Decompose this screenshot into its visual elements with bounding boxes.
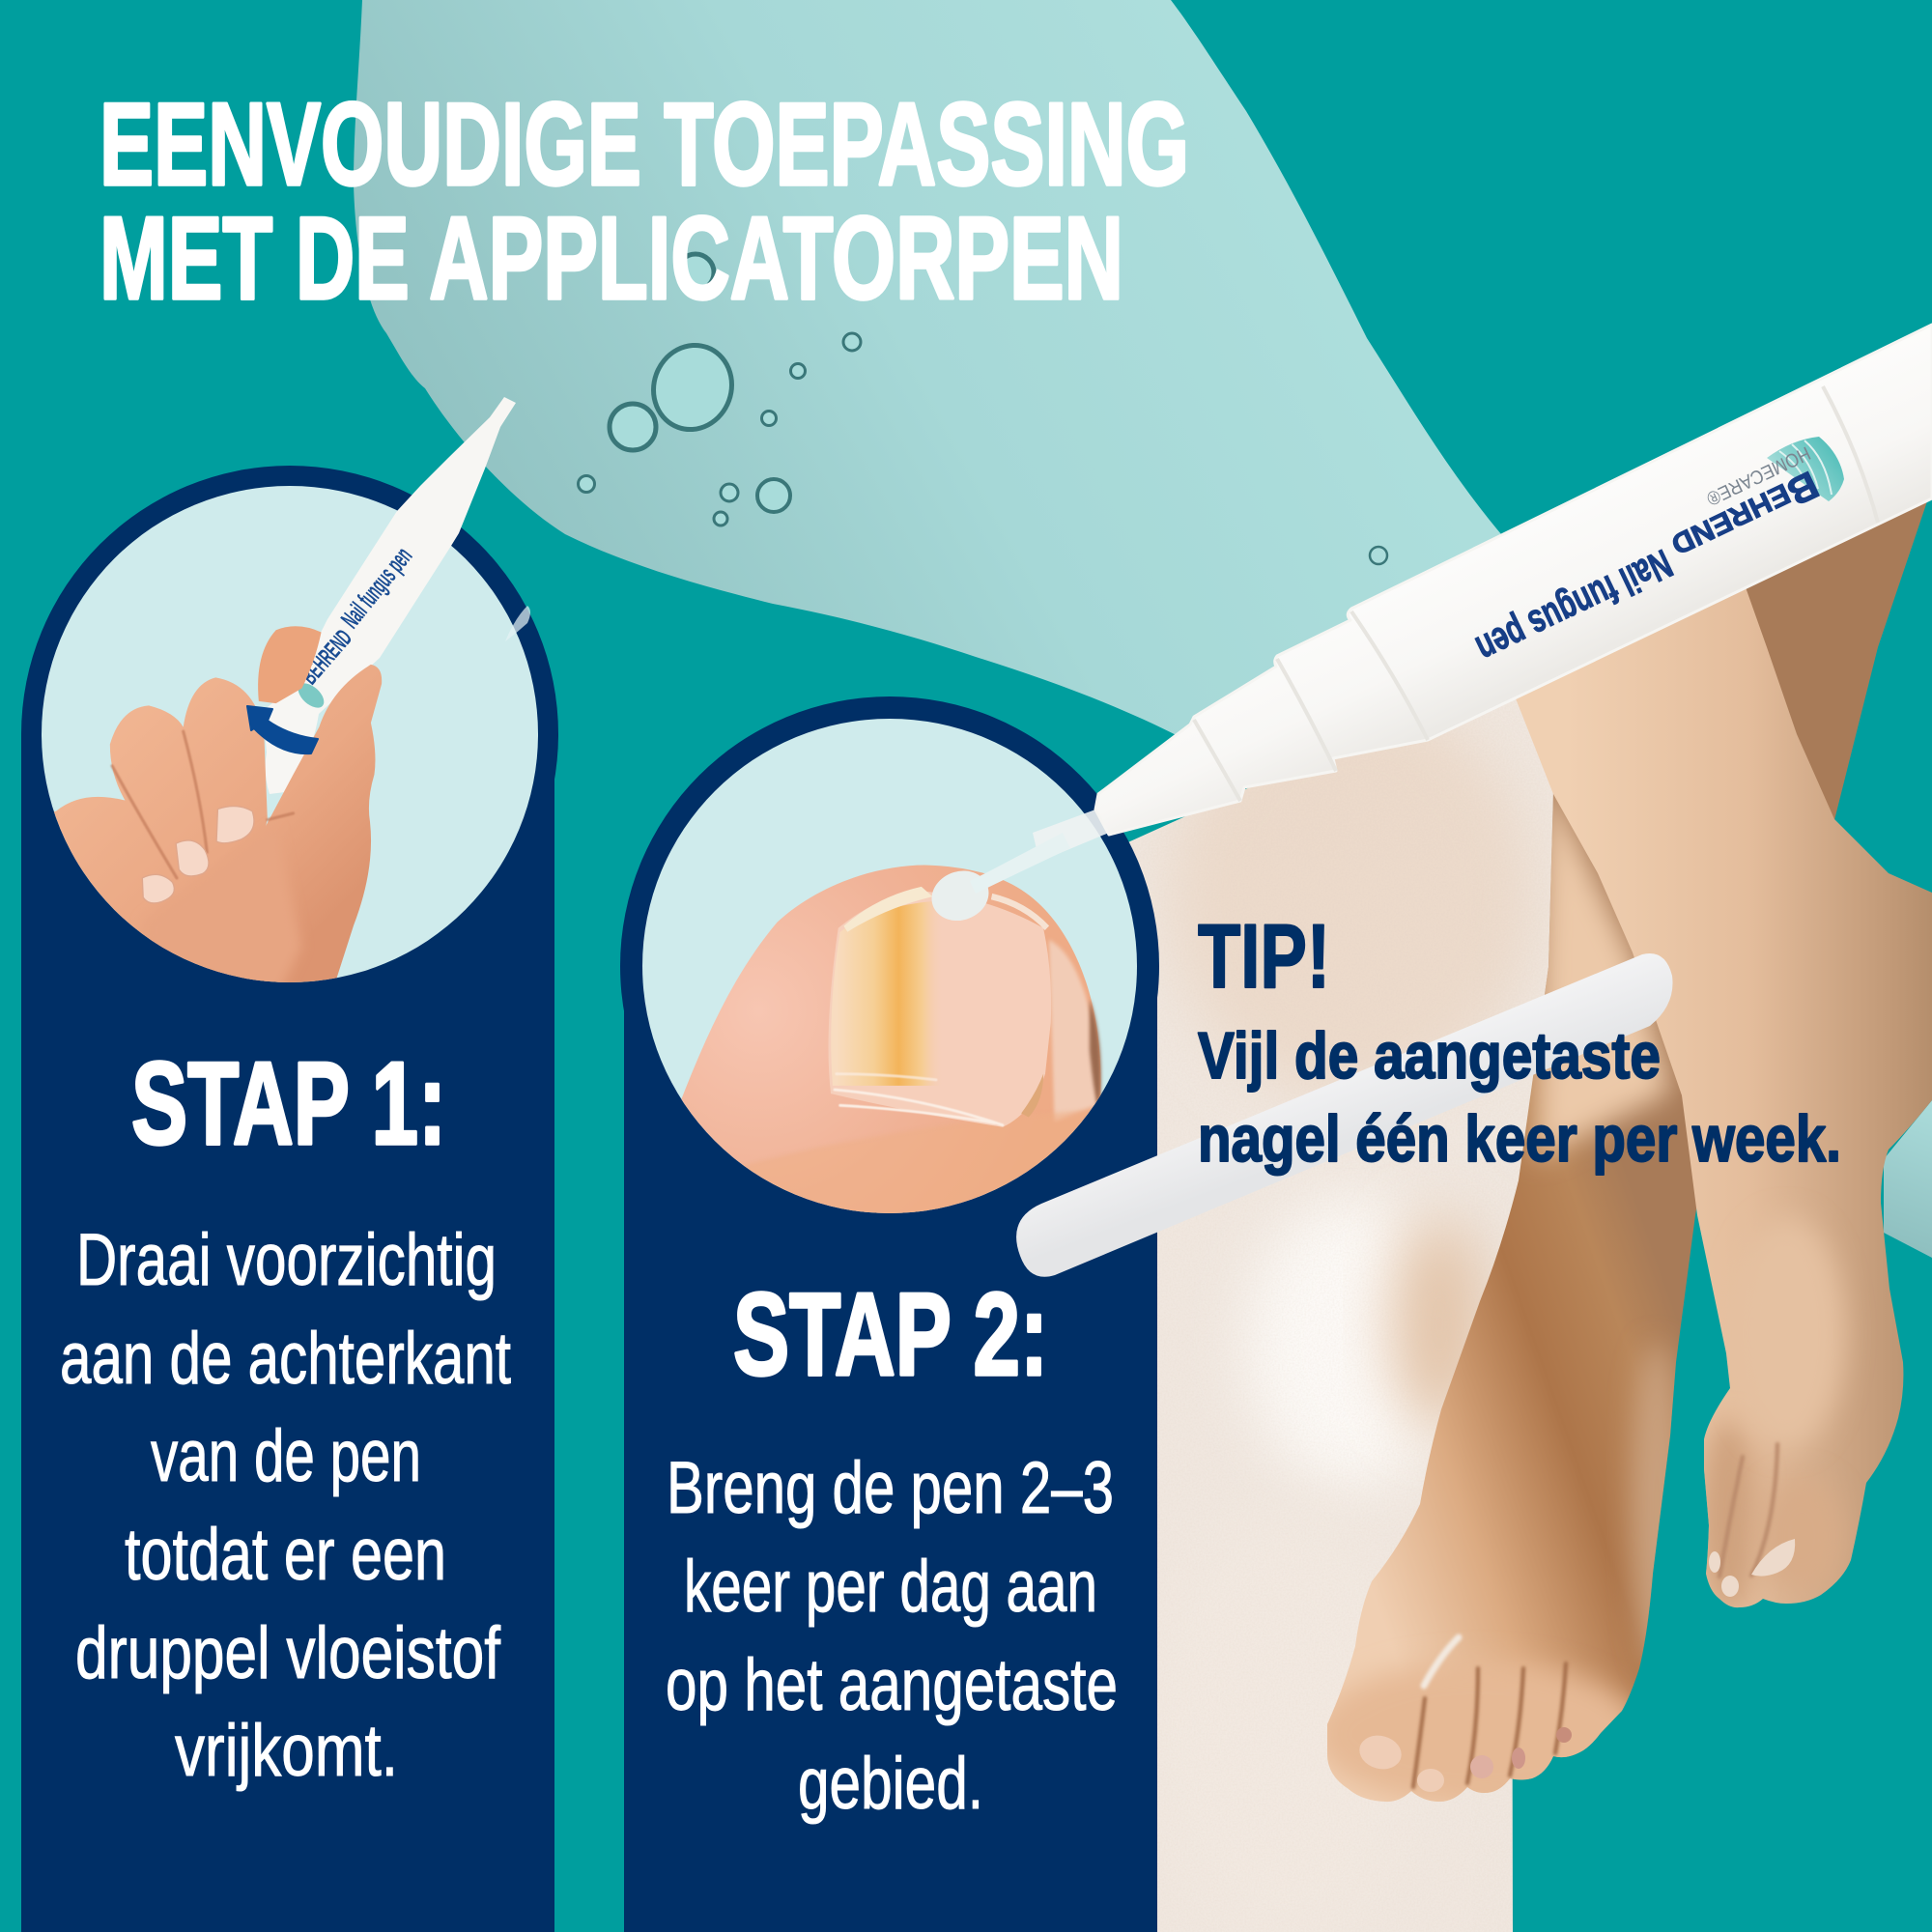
small pen logo (294, 679, 328, 712)
step 1 text: totdat er een (125, 1514, 446, 1596)
lower toe skin (744, 1110, 1090, 1213)
right foot shading (1700, 1217, 1845, 1613)
pen ribs (1194, 386, 1878, 801)
skin fold (992, 896, 1047, 928)
panel: step 2 (620, 696, 1159, 1932)
step 2 light circle (642, 719, 1137, 1213)
tip: TIP! (1198, 905, 1330, 1007)
cuticle flakes (843, 887, 932, 932)
small pen label: Nail fungus pen (335, 542, 417, 634)
homecare brand line: HOMECARE® (1703, 441, 1813, 509)
left foot toenails (1355, 1727, 1572, 1792)
fingernails (142, 807, 254, 903)
step 2 text: gebied. (798, 1743, 983, 1825)
step 1 text: Draai voorzichtig (76, 1219, 497, 1301)
right foot toenails (1709, 1539, 1795, 1597)
toe right skin (1049, 940, 1097, 1122)
left foot toe gaps (1413, 1663, 1566, 1787)
title: EENVOUDIGE TOEPASSING (99, 78, 1189, 210)
step 2 text: op het aangetaste (666, 1644, 1118, 1726)
pen label text: Nail fungus pen (1469, 541, 1679, 672)
rotation arrow (247, 706, 318, 753)
pen droplet (505, 606, 530, 641)
foot shading (1314, 773, 1682, 1806)
back leg and left foot (1314, 464, 1932, 1806)
step 2 text (666, 1447, 1118, 1825)
title (99, 78, 1189, 324)
step 1 text: druppel vloeistof (75, 1612, 501, 1694)
finger creases (112, 731, 294, 878)
fingers and hand (54, 677, 268, 960)
tip: Vijl de aangetaste (1198, 1019, 1661, 1093)
step 1 text: aan de achterkant (60, 1318, 511, 1400)
photo: hand holding pen (54, 397, 530, 982)
nail file (1016, 953, 1673, 1277)
step 1 text: vrijkomt. (175, 1710, 398, 1792)
step 1 text: van de pen (151, 1415, 421, 1497)
pen label text (1469, 463, 1825, 672)
logo wave (1767, 437, 1844, 501)
pen label text: BEHREND (1665, 463, 1825, 568)
step 2 text: Breng de pen 2–3 (667, 1447, 1114, 1529)
small pen (263, 397, 516, 794)
index finger (258, 626, 322, 703)
step 1 light circle (42, 486, 538, 982)
step 2 heading: STAP 2: (733, 1268, 1048, 1400)
front leg and right foot (1507, 541, 1932, 1613)
yellow infected nail part (831, 900, 944, 1086)
toe right edge shadow (1090, 999, 1101, 1113)
nail tip damage (1021, 1074, 1043, 1118)
step 2 text: keer per dag aan (684, 1546, 1097, 1628)
large pen (1095, 325, 1932, 835)
sand between toes (1424, 1637, 1459, 1686)
small pen label: BEHREND (296, 625, 357, 690)
liquid blob shape (354, 0, 1932, 1258)
thumb and palm (133, 665, 383, 982)
panel: step 1 (21, 466, 558, 1932)
title: MET DE APPLICATORPEN (99, 192, 1123, 324)
toe (682, 866, 1101, 1213)
nail (829, 891, 1051, 1127)
step 1 text (60, 1219, 511, 1792)
sand background (1128, 699, 1553, 1932)
tip (1198, 905, 1841, 1176)
small pen label (296, 542, 417, 690)
water bubbles (578, 254, 1387, 564)
right foot toe gaps (1719, 1444, 1777, 1577)
palm lower (142, 823, 301, 982)
photo: infected toe (682, 866, 1103, 1213)
applicator droplet (931, 871, 989, 921)
applicator brush (970, 810, 1109, 894)
nail debris (835, 1074, 1003, 1125)
step 1 heading: STAP 1: (131, 1037, 446, 1169)
